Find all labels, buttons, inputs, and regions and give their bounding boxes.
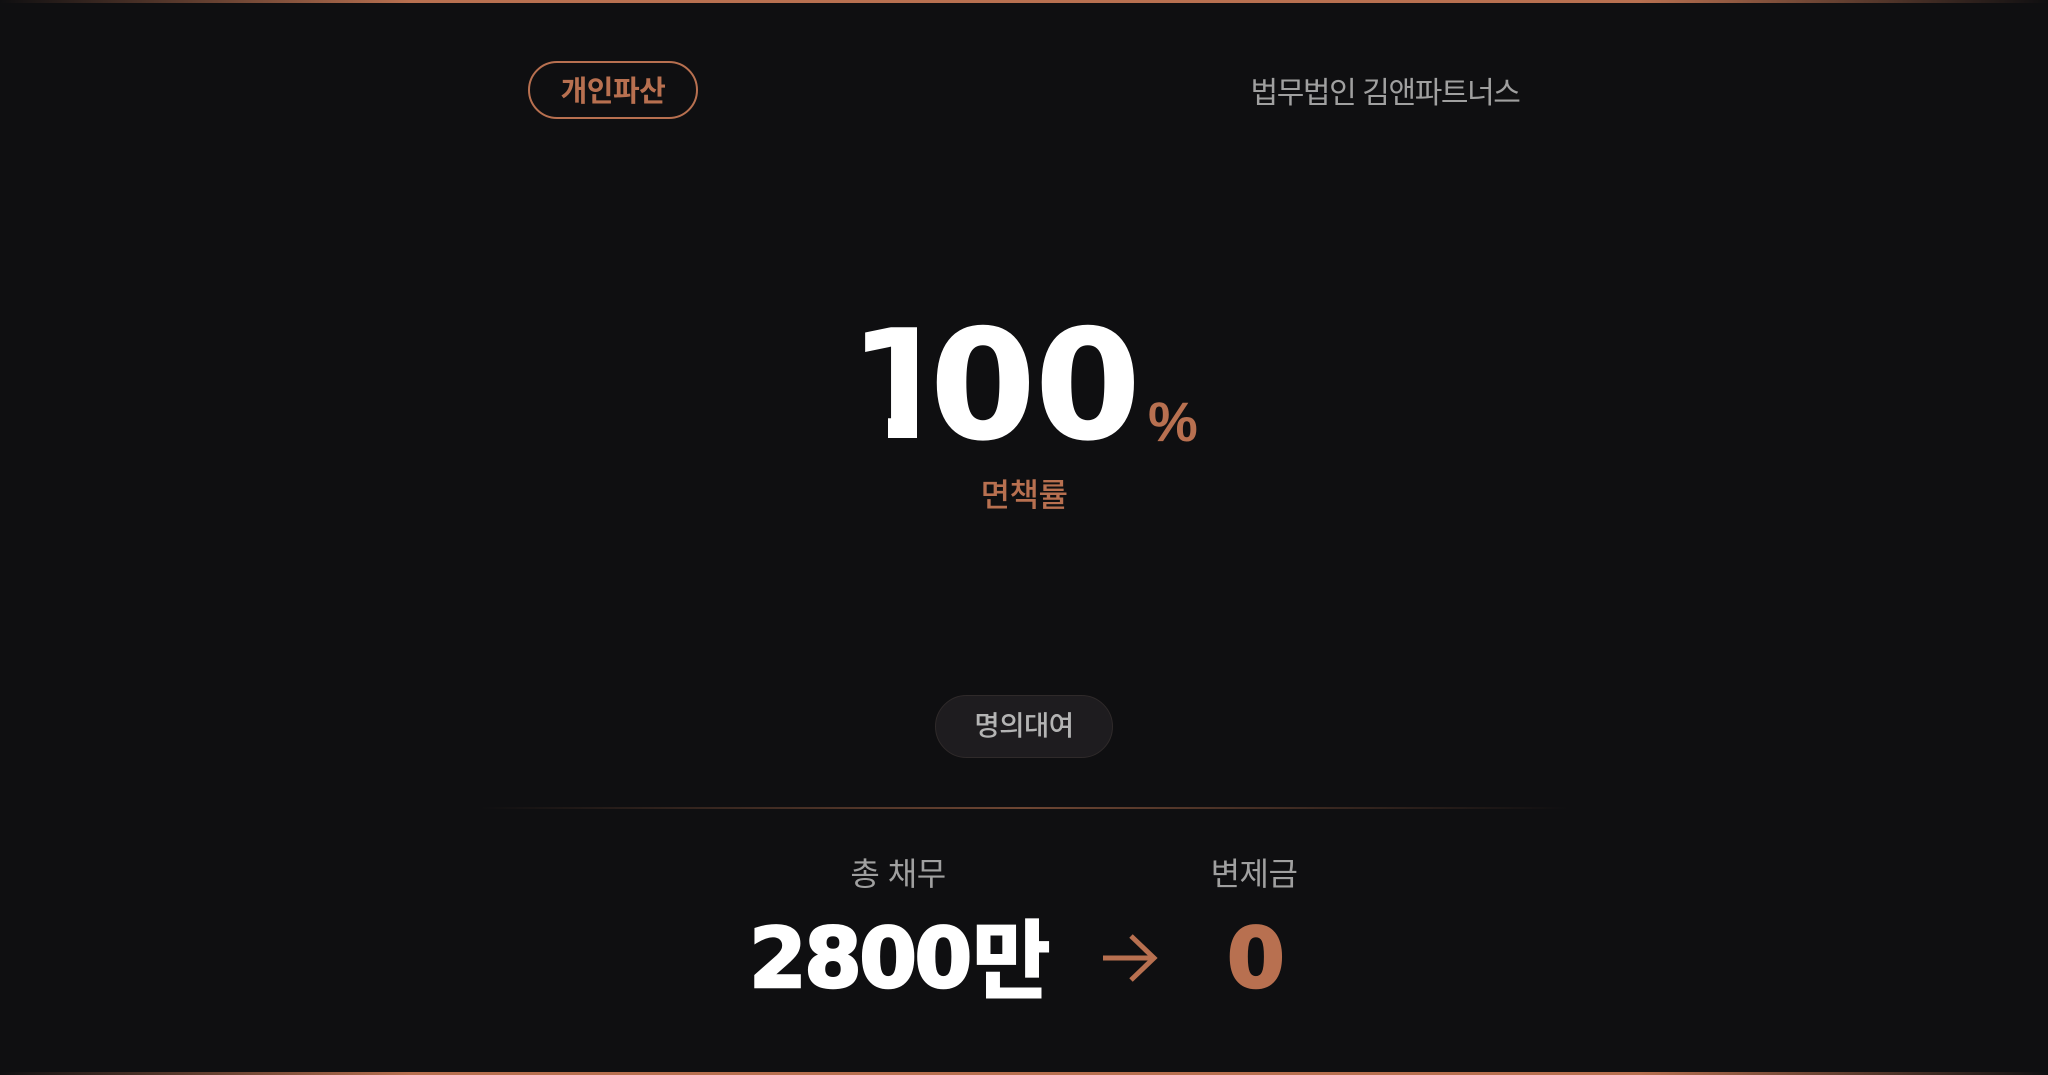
firm name: 법무법인 김앤파트너스 xyxy=(1250,68,1520,112)
digits 00: 00 xyxy=(930,297,1140,474)
value: 28 million xyxy=(749,891,1051,1016)
digit 1: 1 xyxy=(848,297,954,474)
category badge: 개인파산 xyxy=(561,68,665,110)
category badge xyxy=(528,61,698,119)
top accent bar xyxy=(0,0,2048,3)
label: total debt: 총 채무 xyxy=(850,849,946,895)
label: repayment: 변제금 xyxy=(1211,849,1297,895)
tag: name lending: 명의대여 xyxy=(974,703,1074,743)
unit man: 만 xyxy=(972,891,1051,1016)
value: zero: 0 xyxy=(1227,910,1285,1007)
label: discharge rate: 면책률 xyxy=(981,470,1067,516)
tag: name lending xyxy=(935,695,1113,758)
digits 2800: 2800 xyxy=(749,910,970,1007)
divider xyxy=(480,807,1568,809)
icon: arrow xyxy=(1103,934,1158,982)
bottom accent bar xyxy=(0,1072,2048,1075)
main statistic: 100% xyxy=(865,297,1198,474)
percent sign: % xyxy=(1148,390,1198,453)
